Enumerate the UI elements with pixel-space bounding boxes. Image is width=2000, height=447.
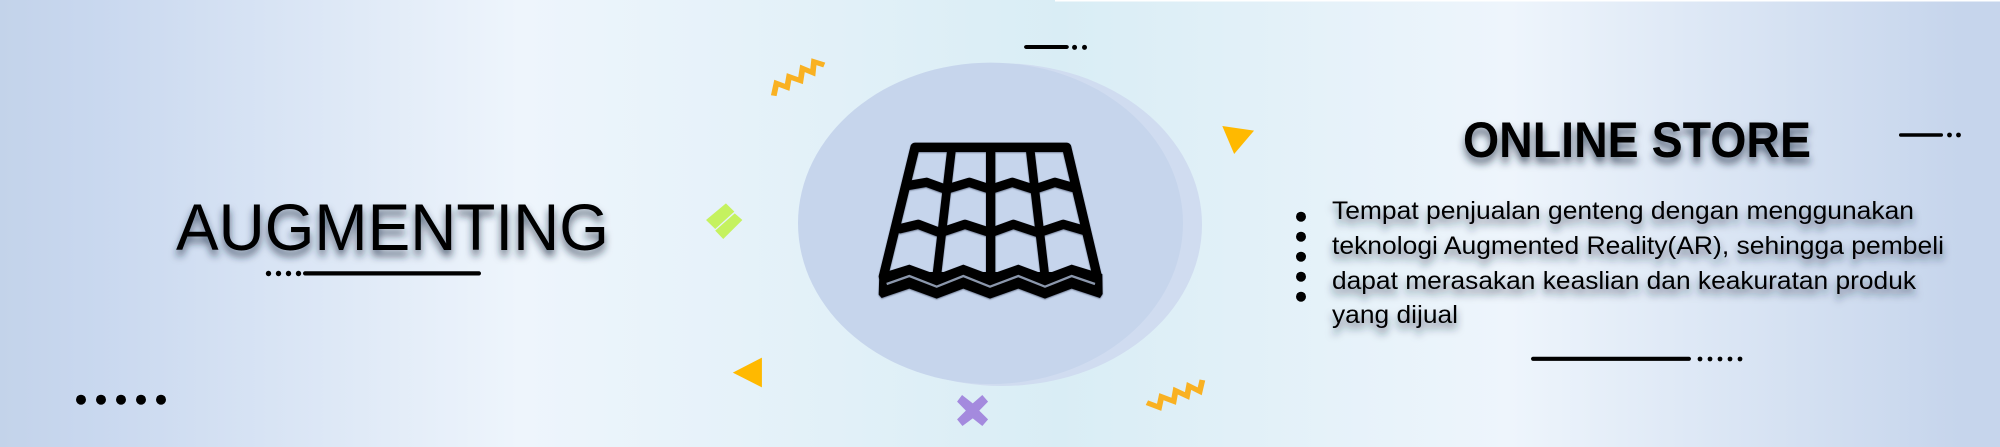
description text <box>1332 197 1944 329</box>
zigzag top left <box>774 62 824 96</box>
icon: roof tiles <box>879 147 1103 299</box>
zigzag bottom right <box>1147 380 1202 407</box>
decorative shapes around circle <box>706 45 1254 426</box>
line with dots top <box>1024 45 1087 50</box>
description text: Tempat penjualan genteng dengan menggunakan <box>1332 197 1914 225</box>
central circle backdrop <box>798 63 1202 386</box>
bullet dots column <box>1296 212 1306 302</box>
line with dots bottom right <box>1531 357 1742 361</box>
purple cross <box>957 395 988 426</box>
description text: yang dijual <box>1332 301 1458 329</box>
line with dots top right <box>1899 133 1961 137</box>
underline with dots below heading <box>266 271 481 276</box>
triangle right <box>1222 126 1254 154</box>
green diamond <box>706 203 742 239</box>
description text: dapat merasakan keaslian dan keakuratan produk <box>1332 267 1917 295</box>
five dots bottom left <box>76 395 166 405</box>
triangle left <box>733 358 762 387</box>
description text: teknologi Augmented Reality(AR), sehingga pembeli <box>1332 232 1944 260</box>
heading: ONLINE STORE: ONLINE STORE <box>1463 112 1811 168</box>
heading: AUGMENTING: AUGMENTING <box>176 190 609 264</box>
